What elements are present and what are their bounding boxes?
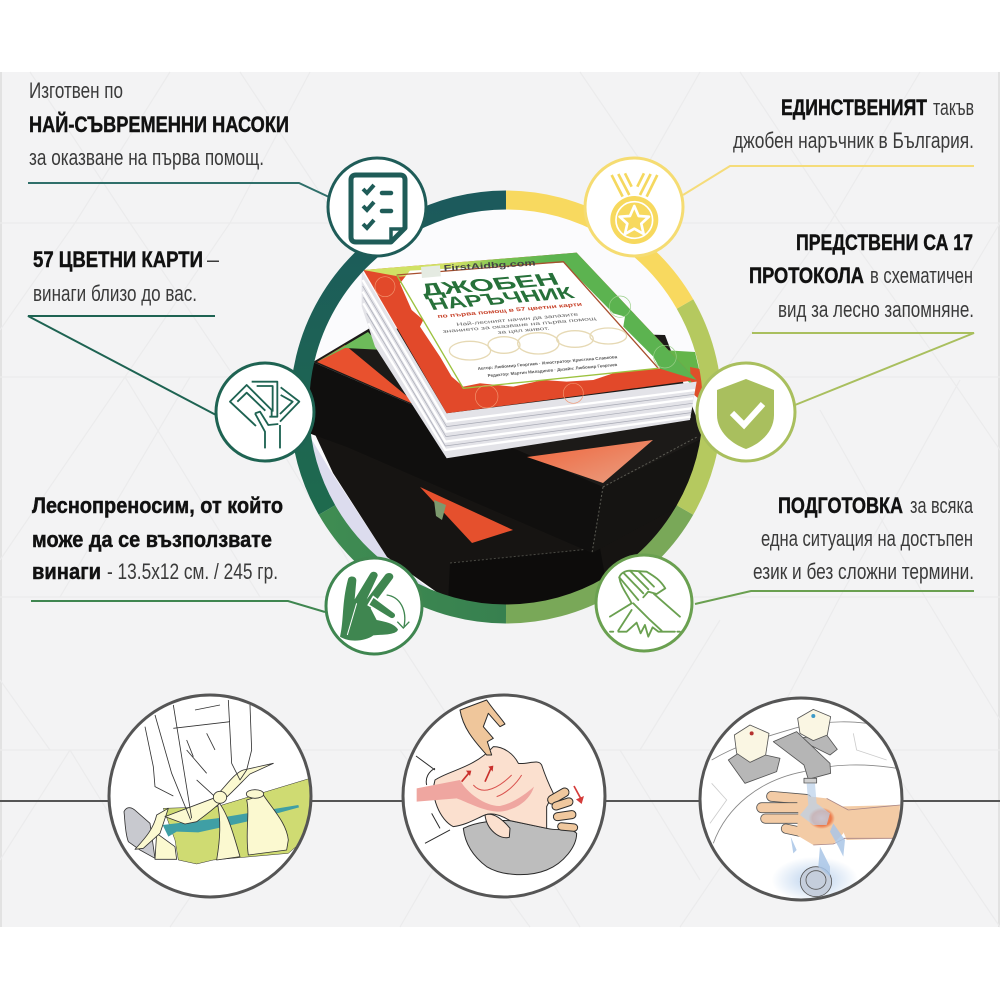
callout: portable size: - 13.5x12 см. / 245 гр. (107, 559, 278, 584)
callout: latest guidelines: Изготвен по (29, 78, 123, 103)
cover text: Редактор: Мартин Миладинов · Дизайн: Любомир Георгиев (487, 362, 618, 378)
icon: hands CPR (596, 555, 692, 651)
illustration: bandaging (109, 695, 313, 897)
cover text: по първа помощ в 57 цветни карти (437, 302, 583, 320)
progress ring (300, 200, 712, 614)
callout: 57 colour cards: винаги близо до вас. (33, 281, 197, 306)
illustration: airway opening (403, 695, 605, 897)
callout: the only one (683, 95, 974, 195)
cover text: знанието за оказване на първа помощ (442, 316, 597, 335)
upper box (300, 328, 705, 553)
timeline connector line (0, 800, 1000, 802)
handbook stack (362, 253, 697, 458)
callout: the only one: такъв (933, 95, 974, 120)
callout: latest guidelines: за оказване на първа помощ. (29, 145, 264, 170)
callout: the only one: ЕДИНСТВЕНИЯТ (781, 95, 927, 120)
callout: portable size (31, 493, 325, 612)
icon: medal (585, 158, 683, 256)
lower box (316, 436, 678, 604)
cover text: за цял живот. (497, 326, 550, 336)
callout: 17 protocols: ПРОТОКОЛА (749, 263, 864, 288)
callout: preparation: ПОДГОТОВКА (778, 493, 903, 518)
callout: portable size: може да се възползвате (32, 527, 272, 552)
callout: preparation: за всяка (910, 493, 974, 518)
callout: 57 colour cards: – (207, 247, 220, 272)
callout: preparation (695, 493, 974, 604)
callout: latest guidelines: НАЙ-СЪВРЕМЕННИ НАСОКИ (29, 112, 289, 137)
callout: portable size: винаги (32, 559, 101, 584)
callout: 57 colour cards (28, 247, 220, 415)
cover text: Най-лесният начин да запазите (455, 311, 580, 328)
callout: portable size: Леснопреносим, от който (32, 493, 283, 518)
callout: 17 protocols (749, 230, 974, 405)
icon: hand holding cards (216, 363, 314, 461)
icon: checklist (328, 158, 426, 256)
cover text (417, 258, 618, 378)
icon: hand gesture (326, 558, 422, 654)
central photo of the handbook on boxes (300, 205, 710, 615)
cover text: Автор: Любомир Георгиев · Илюстратор: Кристина Славкова (477, 354, 618, 371)
icon: shield with check (697, 363, 795, 461)
cover text: FirstAidbg.com (443, 258, 536, 273)
illustration: burn under running water (700, 698, 902, 903)
callout: latest guidelines (28, 78, 329, 197)
cover text: НАРЪЧНИК (425, 283, 577, 314)
callout: 57 colour cards: 57 ЦВЕТНИ КАРТИ (33, 247, 203, 272)
cover text: ДЖОБЕН (417, 270, 563, 300)
